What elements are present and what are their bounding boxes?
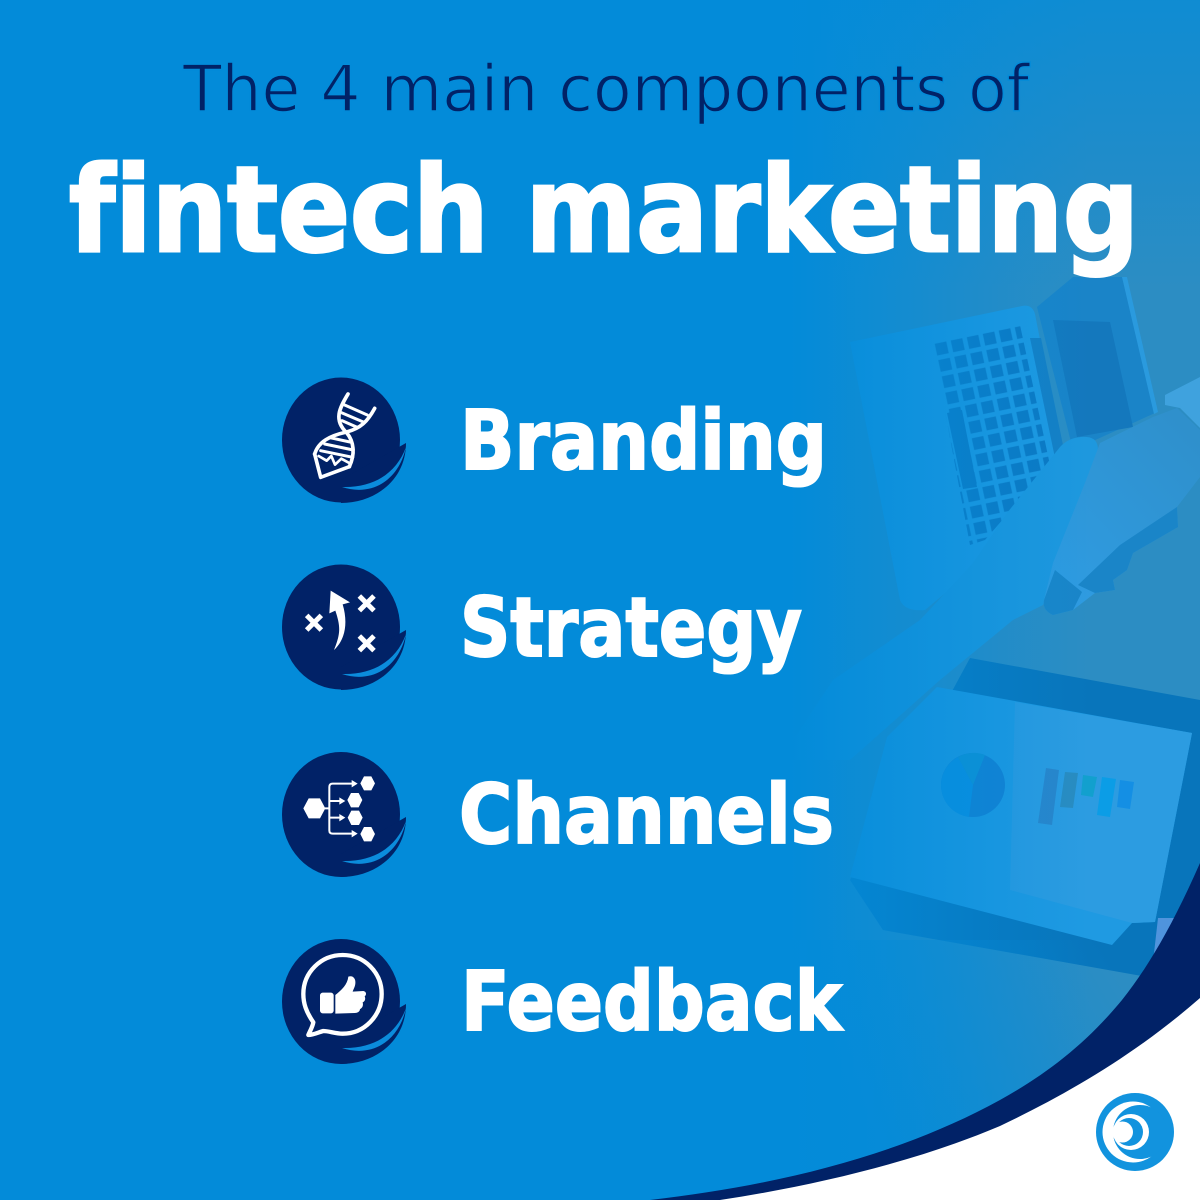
icon: DNA pencil xyxy=(282,378,406,503)
item: Strategy xyxy=(282,564,802,690)
label: Strategy: Strategy xyxy=(460,581,802,676)
paper stack xyxy=(850,687,1192,945)
item: Channels xyxy=(282,752,834,877)
laptop xyxy=(850,277,1158,610)
logo xyxy=(1096,1093,1174,1171)
table xyxy=(850,658,1200,1040)
right hand and wrist xyxy=(1044,408,1200,615)
item: Feedback xyxy=(282,939,844,1064)
chart: bars on paper xyxy=(1038,768,1134,825)
left arm and hand xyxy=(780,437,1098,760)
icon: play diagram xyxy=(282,564,406,690)
chart: pie on paper xyxy=(941,753,1005,817)
label: Channels: Channels xyxy=(459,768,834,863)
corner: white area xyxy=(720,998,1200,1200)
title line 1: The 4 main components of xyxy=(182,53,1030,127)
lower fingers xyxy=(1044,507,1178,615)
shirt cuff xyxy=(1165,377,1200,428)
label: Feedback: Feedback xyxy=(461,955,844,1050)
icon: thumbs up speech bubble xyxy=(282,939,406,1064)
item: Branding xyxy=(282,378,827,503)
photo: handshake over laptop and charts xyxy=(770,0,1200,1200)
icon: branching hexagons xyxy=(282,752,406,877)
label: Branding: Branding xyxy=(460,394,827,489)
corner: navy swoosh xyxy=(650,863,1200,1200)
